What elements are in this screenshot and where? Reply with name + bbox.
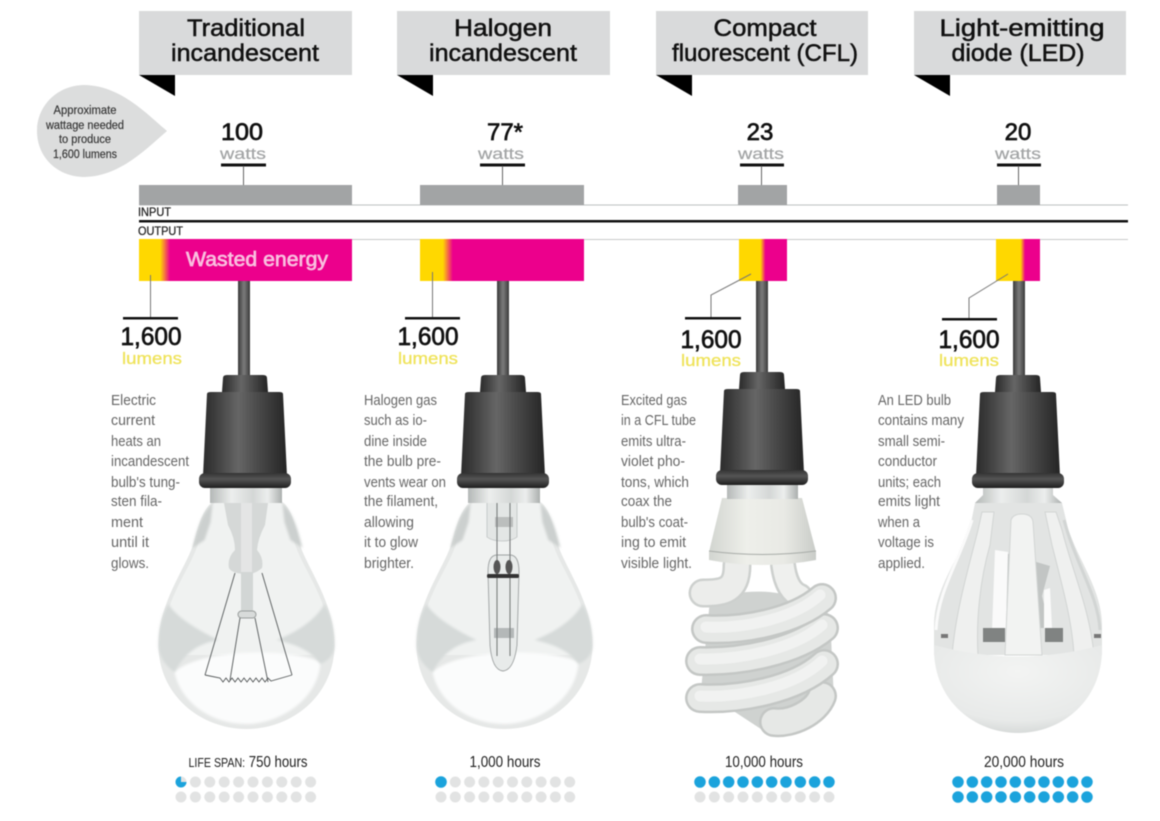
callout: wattage note teardrop: to produce	[59, 134, 111, 146]
lumens label: 1,600	[120, 323, 182, 351]
illustration: halogen bulb	[416, 281, 592, 729]
life span 1,000 hours	[435, 754, 570, 797]
description text: heats an	[111, 433, 161, 450]
description text: conductor	[878, 453, 937, 470]
description text: small semi-	[878, 433, 945, 450]
description text: allowing	[364, 514, 414, 531]
input bar	[997, 185, 1040, 205]
heading: traditional incandescent: Traditional	[187, 15, 305, 42]
input and output axis lines	[138, 204, 1128, 240]
wattage label: 100 watts: watts	[219, 146, 266, 163]
description text: Excited gas	[621, 392, 687, 409]
description text: bulb's coat-	[621, 514, 688, 531]
heading: halogen incandescent	[397, 11, 610, 96]
callout: wattage note teardrop	[37, 85, 167, 177]
description text: it to glow	[364, 534, 418, 551]
wattage label: 23 watts: watts	[737, 146, 784, 163]
illustration: incandescent bulb	[158, 281, 334, 729]
life span 1,000 hours: 1,000 hours	[470, 754, 541, 771]
description text: the bulb pre-	[364, 453, 441, 470]
lumens label	[398, 272, 460, 368]
input and output axis lines: OUTPUT	[138, 226, 183, 238]
diffuser dome	[934, 645, 1102, 733]
life span 10,000 hours	[700, 754, 830, 797]
heading: compact fluorescent: fluorescent (CFL)	[672, 40, 858, 67]
illustration: LED bulb	[934, 281, 1102, 733]
lumens label	[680, 274, 751, 370]
description text: when a	[877, 514, 921, 531]
input and output axis lines: INPUT	[138, 207, 171, 219]
input bar	[420, 185, 584, 205]
description text: in a CFL tube	[621, 412, 696, 429]
description text: coax the	[621, 493, 672, 510]
life span 20,000 hours: 20,000 hours	[984, 754, 1064, 771]
description text: visible light.	[621, 555, 692, 572]
lumens label: 1,600	[938, 326, 1000, 354]
description text	[111, 392, 190, 572]
hook legs	[703, 565, 800, 596]
output bar	[420, 239, 584, 281]
lumens label: lumens	[681, 351, 741, 370]
life span 750 hours: LIFE SPAN: 750 hours	[188, 754, 308, 771]
lumens label: lumens	[398, 349, 458, 368]
heading: halogen incandescent: Halogen	[454, 15, 552, 42]
lumens label: 1,600	[680, 326, 742, 354]
description text: until it	[111, 534, 150, 551]
lumens label	[938, 274, 1008, 370]
panel: compact fluorescent	[621, 11, 868, 797]
description text: voltage is	[878, 534, 934, 551]
heading: light-emitting diode	[914, 11, 1126, 96]
description text: the filament,	[364, 493, 438, 510]
callout: wattage note teardrop: wattage needed	[45, 120, 124, 132]
description text: vents wear on	[364, 474, 446, 491]
input bar	[139, 185, 352, 205]
wattage label: 77 watts	[477, 119, 525, 197]
output bar	[739, 239, 787, 281]
description text: Electric	[111, 392, 156, 409]
description text: brighter.	[364, 555, 414, 572]
description text: tons, which	[621, 474, 689, 491]
wattage label: 100 watts	[219, 119, 266, 197]
description text: incandescent	[111, 453, 190, 470]
description text: ing to emit	[621, 534, 687, 551]
life span 20,000 hours	[958, 754, 1088, 797]
callout: wattage note teardrop: Approximate	[54, 105, 116, 117]
panel: traditional incandescent	[111, 11, 352, 797]
panel: light-emitting diode	[877, 11, 1126, 797]
wattage label: 77 watts: watts	[477, 146, 524, 163]
wattage label: 100 watts: 100	[221, 119, 263, 146]
panel: halogen incandescent	[364, 11, 610, 797]
description text: ment	[111, 514, 144, 531]
description text	[877, 392, 964, 572]
output bar with wasted energy: Wasted energy	[186, 249, 328, 271]
description text: sten fila-	[111, 493, 162, 510]
wattage label: 20 watts: 20	[1005, 119, 1031, 146]
lumens label: lumens	[939, 351, 999, 370]
description text: glows.	[111, 555, 149, 572]
wattage label: 20 watts: watts	[994, 146, 1041, 163]
callout: wattage note teardrop: 1,600 lumens	[53, 149, 117, 161]
heading: compact fluorescent	[656, 11, 868, 96]
illustration: CFL bulb	[700, 281, 834, 735]
output bar	[996, 239, 1040, 281]
wattage label: 20 watts	[994, 119, 1041, 197]
heading: traditional incandescent: incandescent	[171, 40, 319, 67]
spiral tube backing	[700, 592, 834, 735]
description text: dine inside	[364, 433, 427, 450]
output bar with wasted energy	[139, 239, 352, 281]
life span 750 hours	[176, 754, 311, 797]
description text	[364, 392, 446, 572]
heading: traditional incandescent	[139, 11, 352, 96]
description text: contains many	[878, 412, 964, 429]
description text: units; each	[878, 474, 941, 491]
description text: emits ultra-	[621, 433, 686, 450]
wattage label: 23 watts	[737, 119, 784, 197]
heading: halogen incandescent: incandescent	[429, 40, 577, 67]
description text: Halogen gas	[364, 392, 437, 409]
wattage label: 77 watts: 77*	[487, 119, 523, 146]
front coils	[700, 595, 824, 722]
heading: light-emitting diode: diode (LED)	[952, 40, 1084, 67]
heading: light-emitting diode: Light-emitting	[940, 15, 1104, 42]
description text: An LED bulb	[878, 392, 951, 409]
lumens label: 1,600	[398, 323, 458, 351]
description text: applied.	[878, 555, 925, 572]
input bar	[738, 185, 787, 205]
description text: such as io-	[364, 412, 427, 429]
description text: emits light	[878, 493, 941, 510]
lumens label	[120, 275, 182, 368]
wattage label: 23 watts: 23	[747, 119, 773, 146]
description text: bulb's tung-	[111, 474, 180, 491]
life span 10,000 hours: 10,000 hours	[725, 754, 803, 771]
description text: current	[111, 412, 156, 429]
description text: violet pho-	[621, 453, 685, 470]
description text	[621, 392, 696, 572]
lumens label: lumens	[122, 349, 182, 368]
heading: compact fluorescent: Compact	[714, 15, 817, 42]
